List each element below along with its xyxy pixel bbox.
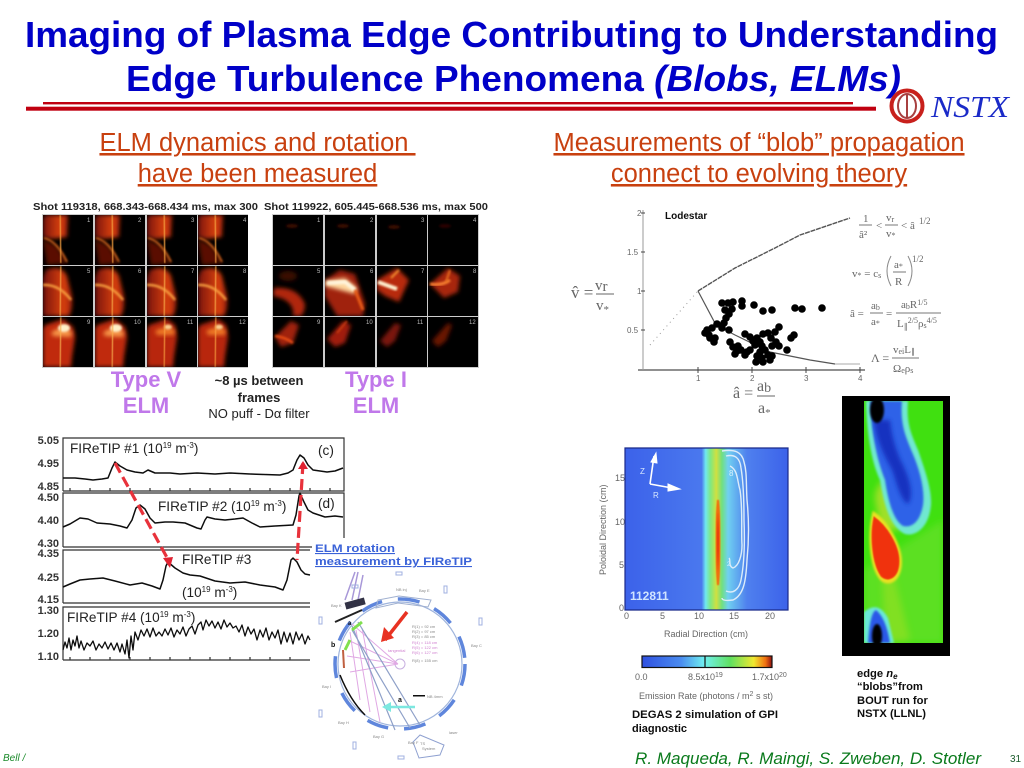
frames: Type I ELM: 12 (469, 320, 476, 326)
equation: collisionality: ρ (905, 363, 911, 375)
axis labels (598, 473, 775, 639)
frames: Type V ELM: 7 (191, 269, 195, 275)
equation: velocity bounds: v (886, 228, 892, 240)
footer: authors: R. Maqueda, R. Maingi, S. Zweben, D. Stotler (635, 749, 982, 768)
equation: velocity bounds: * (892, 231, 896, 240)
data points (701, 297, 826, 366)
equation: velocity bounds (859, 212, 931, 241)
chart: Lodestar blob velocity (571, 209, 941, 419)
frames: Type I ELM: 10 (366, 320, 373, 326)
label: Type I ELM: Type I (345, 367, 407, 392)
labels: FIReTIP #1 (10 (70, 441, 163, 456)
equation: a-hat scaling: R (910, 299, 918, 311)
axis ticks: 4 (858, 374, 863, 383)
torus cross-section: Bay G (373, 734, 384, 739)
torus cross-section: NB 4mm (427, 694, 443, 699)
chart: FIReTIP time traces: ) (282, 499, 286, 514)
frames: Type V ELM: 6 (138, 269, 142, 275)
equation: collisionality (871, 344, 919, 375)
equation: a-hat scaling: a (871, 300, 876, 312)
chart title: Lodestar (665, 211, 707, 222)
equation: a-hat scaling: 4/5 (927, 316, 937, 325)
axis labels: 4.50 (38, 492, 59, 504)
equation: v-star: = c (862, 268, 878, 280)
frames: Type I ELM: 11 (417, 320, 424, 326)
caption: Type I shot: Shot 119922, 605.445-668.536 ms, max 500 (264, 202, 488, 213)
equation: velocity bounds: â² (859, 229, 868, 241)
axis labels: 4.30 (38, 538, 59, 550)
equation: a-hat (733, 378, 775, 419)
equation: v-hat: v (596, 298, 604, 314)
axis labels: 15 (615, 473, 625, 483)
equation: a-hat scaling: b (876, 303, 880, 312)
frames: Type V ELM: 2 (138, 218, 142, 224)
equation: v-star: v (852, 268, 858, 280)
equation: velocity bounds: v (886, 212, 892, 224)
equation: collisionality: L (904, 344, 911, 356)
chart: FIReTIP time traces: 19 (160, 610, 169, 619)
chart: FIReTIP time traces: m (169, 610, 184, 625)
frames: Type I ELM: 9 (317, 320, 321, 326)
equation: v-hat: * (604, 304, 609, 316)
torus cross-section: Bay K (331, 603, 342, 608)
chart: BOUT edge density blobs (842, 396, 950, 720)
caption: DEGAS 2: DEGAS 2 simulation of GPI (632, 709, 778, 721)
frames: Type V ELM: 11 (187, 320, 194, 326)
axis ticks: 0.5 (627, 326, 639, 335)
heat map (625, 448, 788, 610)
axis labels: Poloidal Direction (cm) (598, 484, 608, 575)
chart: DEGAS 2 GPI simulation (598, 448, 788, 735)
chart: FIReTIP time traces: (d) (318, 496, 335, 511)
equation: velocity bounds: < â (901, 220, 915, 232)
colour bar: s st) (753, 691, 773, 701)
frames: Type I ELM: 3 (421, 218, 425, 224)
equation: v-star: * (899, 262, 903, 271)
equation: v-star: R (895, 276, 903, 288)
axis labels: 1.10 (38, 651, 59, 663)
caption: BOUT: edge n (857, 668, 893, 680)
equation: a-hat scaling: a (871, 316, 876, 328)
icon: Z-R axes: R (653, 491, 659, 500)
axis ticks: 1 (696, 374, 701, 383)
axis labels: 5 (660, 611, 665, 621)
axis labels: 4.15 (38, 594, 59, 606)
chart: FIReTIP time traces: (10 (182, 585, 202, 600)
equation: collisionality: s (910, 366, 913, 375)
axis labels: 5 (619, 560, 624, 570)
axis ticks: 2 (750, 374, 755, 383)
labels: ) (194, 441, 198, 456)
equation: velocity bounds: < (876, 220, 882, 232)
torus cross-section: b (331, 642, 335, 649)
equation: velocity bounds: r (892, 215, 894, 224)
equation: a-hat scaling: b (906, 302, 910, 311)
labels: m (172, 441, 187, 456)
equation: a-hat: a (757, 378, 764, 395)
equation: a-hat: b (764, 381, 771, 396)
axis labels: 4.95 (38, 458, 59, 470)
equation: v-hat (571, 278, 614, 316)
equation: a-hat scaling (850, 298, 941, 331)
colour bar: 0.0 (635, 672, 648, 682)
axis labels: 1.20 (38, 628, 59, 640)
heading: FIReTIP rotation: ELM rotation (315, 543, 395, 555)
chart: FIReTIP time traces: m (260, 499, 275, 514)
frames: Type I ELM: 8 (473, 269, 477, 275)
equation: v-star (852, 254, 924, 288)
torus cross-section: R(3) = 85 cm (412, 634, 436, 639)
caption: BOUT: e (893, 672, 898, 681)
frames: Type V ELM: 5 (87, 269, 91, 275)
axis labels: 5.05 (38, 435, 59, 447)
torus cross-section: System (422, 746, 436, 751)
equation: collisionality: ei (898, 347, 905, 356)
equation: collisionality: ∥ (911, 347, 915, 356)
heading: blob propagation: connect to evolving theory (611, 160, 907, 188)
frames: Type V ELM (42, 214, 248, 368)
title: Edge Turbulence Phenomena (Blobs, ELMs) (126, 58, 901, 99)
equation: velocity bounds: 1/2 (919, 216, 931, 226)
chart: FIReTIP time traces (38, 435, 344, 663)
heat map: 8 (729, 469, 734, 478)
axis ticks: 2 (637, 209, 642, 218)
equation: a-hat scaling: â = (850, 308, 864, 320)
torus cross-section: tangential (388, 648, 405, 653)
equation: a-hat scaling: 2/5 (908, 316, 918, 325)
frames: Type V ELM: 1 (87, 218, 91, 224)
chart: FIReTIP time traces: 19 (202, 585, 211, 594)
chart: FIReTIP time traces: ) (191, 610, 195, 625)
axis labels: 4.40 (38, 515, 59, 527)
diagram: ELM rotation measurement (315, 543, 482, 759)
torus cross-section: TS (420, 741, 425, 746)
torus cross-section: Bay H (338, 720, 349, 725)
equation: v-star: * (858, 271, 862, 280)
frames: Type V ELM: 8 (243, 269, 247, 275)
torus cross-section: R(6) = 127 cm (412, 650, 438, 655)
torus cross-section: R(5) = 122 cm (412, 645, 438, 650)
torus cross-section: Bay E (419, 588, 430, 593)
frames: Type I ELM: 1 (317, 218, 321, 224)
equation: a-hat scaling: a (901, 299, 906, 311)
equation: a-hat: â = (733, 385, 753, 402)
axis labels: 4.85 (38, 481, 59, 493)
limit curves (650, 218, 860, 364)
axis labels: 0 (619, 603, 624, 613)
equation: v-hat: v (595, 278, 602, 294)
label: Type V ELM: ELM (123, 393, 169, 418)
heading: ELM dynamics: ELM dynamics and rotation (99, 129, 416, 157)
chart: FIReTIP time traces: ) (233, 585, 237, 600)
colour bar: 1.7x10 (752, 672, 779, 682)
colour bar (635, 656, 787, 701)
panel: ELM camera frames (33, 202, 488, 421)
torus cross-section: Bay C (471, 643, 482, 648)
shot number: 112811 (630, 589, 669, 603)
chart: FIReTIP time traces: 19 (251, 499, 260, 508)
torus cross-section: NB inj (396, 587, 407, 592)
chart: FIReTIP time traces: FIReTIP #4 (10 (67, 610, 160, 625)
title: Imaging of Plasma Edge Contributing to Understanding (25, 14, 998, 55)
label: Type I ELM: ELM (353, 393, 399, 418)
icon: Z-R axes: Z (640, 467, 645, 476)
torus cross-section: a (398, 697, 402, 704)
axis labels: 10 (615, 517, 625, 527)
axis labels: 1.30 (38, 605, 59, 617)
equation: a-hat scaling: 1/5 (917, 298, 927, 307)
frames: Type I ELM: 4 (473, 218, 477, 224)
footer: slide label: Bell / (3, 753, 26, 764)
frames: Type V ELM: 12 (239, 320, 246, 326)
colour bar: 19 (715, 672, 723, 679)
note: frame spacing: frames (238, 390, 280, 405)
colour bar: 8.5x10 (688, 672, 715, 682)
note: frame spacing: ~8 µs between (215, 373, 303, 388)
heading: blob propagation: Measurements of “blob” propagation (553, 129, 965, 157)
equation: a-hat: a (758, 400, 765, 417)
frames: Type I ELM: 7 (421, 269, 425, 275)
equation: a-hat scaling: L (897, 318, 904, 330)
heading: ELM dynamics (99, 129, 416, 188)
axes and frames (63, 438, 344, 660)
torus cross-section: laser (449, 730, 458, 735)
heading: ELM dynamics: have been measured (138, 160, 377, 188)
torus cross-section: Bay F (408, 740, 419, 745)
arrows: ELM propagation (115, 461, 308, 568)
footer: page number: 31 (1010, 754, 1022, 765)
frames: Type I ELM: 2 (370, 218, 374, 224)
frames: Type V ELM: 3 (191, 218, 195, 224)
caption: BOUT: “blobs”from (857, 681, 923, 693)
chart: FIReTIP time traces: FIReTIP #2 (10 (158, 499, 251, 514)
axis labels: 0 (624, 611, 629, 621)
heat map: 2 (727, 562, 731, 568)
chart: FIReTIP time traces: -3 (226, 585, 233, 594)
axis labels: 10 (694, 611, 704, 621)
torus cross-section: Bay I (322, 684, 331, 689)
torus cross-section: R(8) = 155 cm (412, 658, 438, 663)
colour bar: Emission Rate (photons / m (639, 691, 750, 701)
logo: NSTX: NSTX (930, 89, 1010, 124)
label: Type V ELM: Type V (111, 367, 182, 392)
frames: Type I ELM: 6 (370, 269, 374, 275)
axis labels: 4.25 (38, 572, 59, 584)
axis ticks (627, 209, 863, 383)
frames: Type V ELM: 9 (87, 320, 91, 326)
caption: BOUT: NSTX (LLNL) (857, 708, 926, 720)
equation: a-hat scaling: = (886, 308, 892, 320)
axis ticks: 1.5 (627, 248, 639, 257)
logo: NSTX (892, 89, 1010, 124)
chart: FIReTIP time traces: FIReTIP #3 (182, 552, 251, 567)
chart: FIReTIP time traces: -3 (275, 499, 282, 508)
labels: 19 (163, 441, 172, 450)
title (25, 14, 998, 99)
frames: Type V ELM: 10 (134, 320, 141, 326)
torus cross-section: R(1) = 92 cm (412, 624, 436, 629)
equation: v-star: s (878, 271, 881, 280)
axis labels: 20 (765, 611, 775, 621)
heading: blob propagation (553, 129, 965, 188)
equation: a-hat scaling: ∥ (904, 322, 908, 331)
equation: velocity bounds: 1 (863, 213, 868, 225)
torus cross-section: R(2) = 97 cm (412, 629, 436, 634)
frames: Type V ELM: 4 (243, 218, 247, 224)
equation: a-hat scaling: s (923, 321, 927, 330)
equation: v-star: a (894, 259, 899, 271)
torus cross-section: a (348, 621, 352, 627)
heat map (842, 396, 950, 656)
equation: collisionality: v (893, 344, 898, 356)
equation: v-hat: r (602, 279, 608, 295)
equation: a-hat: * (765, 407, 771, 419)
heading: FIReTIP rotation: measurement by FIReTIP (315, 556, 472, 568)
caption: DEGAS 2: diagnostic (632, 723, 687, 735)
axis labels: Radial Direction (cm) (664, 629, 748, 639)
equation: a-hat scaling: * (876, 319, 880, 328)
note: frame spacing: NO puff - Dα filter (208, 406, 310, 421)
equation: collisionality: Ω (893, 363, 901, 375)
frames: Type I ELM: 5 (317, 269, 321, 275)
colour bar: 20 (779, 672, 787, 679)
equation: collisionality: Λ = (871, 351, 889, 365)
axis ticks: 3 (804, 374, 809, 383)
axis labels: 15 (729, 611, 739, 621)
caption: Type V shot: Shot 119318, 668.343-668.434 ms, max 300 (33, 202, 258, 213)
equation: v-hat: v̂ = (571, 283, 593, 302)
colour bar: 2 (750, 691, 754, 698)
traces (63, 455, 343, 658)
caption: BOUT: BOUT run for (857, 695, 928, 707)
axis labels (38, 435, 59, 663)
torus cross-section (319, 572, 482, 759)
chart: FIReTIP time traces: m (211, 585, 226, 600)
labels: -3 (187, 441, 194, 450)
axis labels: 4.35 (38, 548, 59, 560)
axis ticks: 1 (637, 287, 642, 296)
equation: a-hat scaling: ρ (918, 318, 924, 330)
equation: v-star: 1/2 (912, 254, 924, 264)
axes (638, 210, 865, 373)
equation: collisionality: e (901, 366, 905, 375)
chart: FIReTIP time traces: -3 (184, 610, 191, 619)
icon: Z-R axes (640, 453, 680, 500)
torus cross-section: R(4) = 118 cm (412, 640, 438, 645)
frames: Type I ELM (272, 214, 479, 368)
chart: FIReTIP time traces: (c) (318, 443, 334, 458)
